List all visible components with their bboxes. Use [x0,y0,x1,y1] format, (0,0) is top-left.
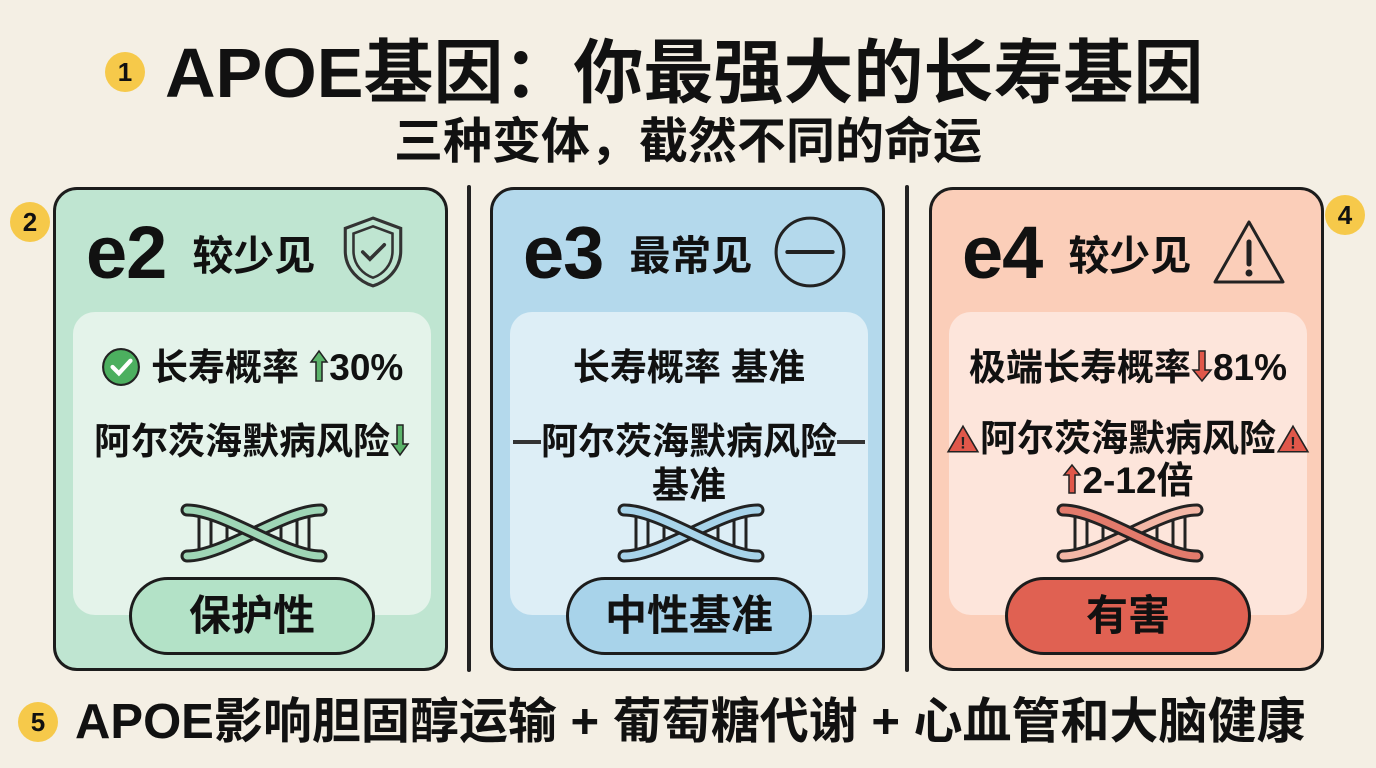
pill: protective: 保护性 [189,592,315,639]
icon: shield [344,216,402,288]
panel: e2 [53,187,448,671]
icon: dna [1056,504,1204,562]
e4 header [962,210,1285,294]
alzheimer line: ! [1290,434,1296,453]
badge 5: 5 [31,707,45,737]
badge 2: 2 [23,207,37,237]
pill: protective [129,577,375,655]
alzheimer line: 阿尔茨海默病风险 [980,418,1276,459]
bottom text: APOE影响胆固醇运输 + 葡萄糖代谢 + 心血管和大脑健康 [75,695,1306,749]
alzheimer line: 基准 [652,465,726,506]
pill: harmful [1005,577,1251,655]
pill: neutral [566,577,812,655]
pill: neutral: 中性基准 [605,592,773,639]
e3 header: e3 [523,210,603,294]
icon: dna [180,504,328,562]
badge 1: 1 [118,57,132,87]
longevity line: 长寿概率 基准 [573,347,805,388]
alzheimer line [513,421,865,506]
title: APOE基因：你最强大的长寿基因 [165,34,1203,112]
subtitle: 三种变体，截然不同的命运 [394,115,982,169]
alzheimer line [946,418,1310,501]
panel: e4 [929,187,1324,671]
inner box e3 [510,312,868,615]
e3 header: 最常见 [629,233,752,279]
alzheimer line: 2-12倍 [1082,460,1194,501]
badge 2 [10,202,50,242]
inner box e4 [949,312,1307,615]
icon: neutral circle [774,216,846,288]
longevity line: 极端长寿概率 81% [969,347,1287,388]
badge 1 [105,52,145,92]
e4 header: 较少见 [1068,233,1191,279]
icon: warning [1214,220,1285,284]
e4 header: e4 [962,210,1042,294]
panel: e3 [490,187,885,671]
alzheimer line: 阿尔茨海默病风险 [94,421,390,462]
e2 header [86,210,402,294]
longevity line: 长寿概率 30% [151,347,403,388]
badge 4 [1325,195,1365,235]
icon: dna [618,504,764,562]
pill: harmful: 有害 [1086,592,1170,639]
e2 header: 较少见 [192,233,315,279]
badge 5 [18,702,58,742]
e3 header [523,210,846,294]
alzheimer line: ! [960,434,966,453]
inner box e2 [73,312,431,615]
e2 header: e2 [86,210,166,294]
alzheimer line: 阿尔茨海默病风险 [541,421,837,462]
badge 4: 4 [1338,200,1352,230]
